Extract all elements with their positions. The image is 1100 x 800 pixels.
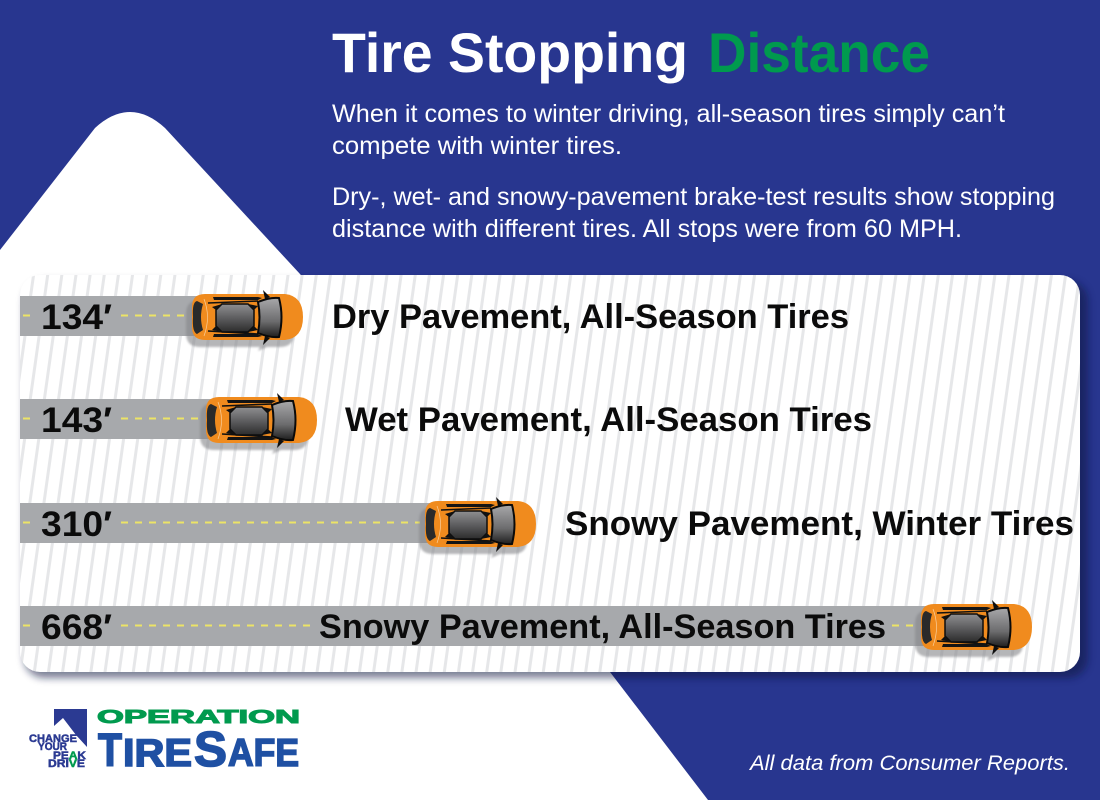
source note: All data from Consumer Reports. (748, 752, 1070, 775)
row: wet pavement, all-season tires (20, 393, 872, 454)
logo wordmark (97, 707, 300, 777)
logo tagline: YOUR (38, 741, 67, 753)
logo tagline (29, 733, 86, 770)
row: wet pavement, all-season tires: Wet Pavement, All-Season Tires (345, 401, 872, 439)
row: snowy pavement, all-season tires: Snowy Pavement, All-Season Tires (319, 608, 886, 646)
title: Tire Stopping (332, 21, 688, 84)
title: Distance (708, 21, 930, 84)
row: snowy pavement, winter tires: Snowy Pavement, Winter Tires (565, 505, 1074, 543)
row: snowy pavement, winter tires (20, 497, 1074, 558)
intro text (332, 100, 1005, 160)
row: wet pavement, all-season tires: 143′ (41, 401, 112, 440)
logo wordmark: AFE (228, 732, 299, 775)
row: dry pavement, all-season tires: Dry Pavement, All-Season Tires (332, 298, 849, 336)
logo wordmark: T (98, 724, 122, 776)
title (332, 21, 930, 84)
method text: Dry-, wet- and snowy-pavement brake-test results show stopping (332, 183, 1055, 211)
icon: mountain peak (54, 709, 87, 747)
panel: stopping distance chart (20, 275, 1088, 678)
row: dry pavement, all-season tires (20, 290, 849, 351)
logo wordmark: IRE (123, 732, 192, 775)
logo tagline: CHANGE (29, 733, 77, 745)
intro text: compete with winter tires. (332, 132, 622, 160)
logo: Operation TireSafe (29, 707, 300, 777)
intro text: When it comes to winter driving, all-season tires simply can’t (332, 100, 1005, 128)
row: snowy pavement, winter tires: 310′ (41, 505, 112, 544)
logo tagline: DRIVE (48, 758, 85, 770)
row: snowy pavement, all-season tires: 668′ (41, 608, 112, 647)
logo wordmark: S (194, 723, 227, 777)
method text: distance with different tires. All stops were from 60 MPH. (332, 215, 962, 243)
row: dry pavement, all-season tires: 134′ (41, 298, 112, 337)
background: white mountain (0, 112, 708, 800)
logo tagline: PEAK (53, 750, 86, 762)
row: snowy pavement, all-season tires (20, 600, 1032, 661)
method text (332, 183, 1055, 243)
logo wordmark: OPERATION (97, 707, 300, 727)
